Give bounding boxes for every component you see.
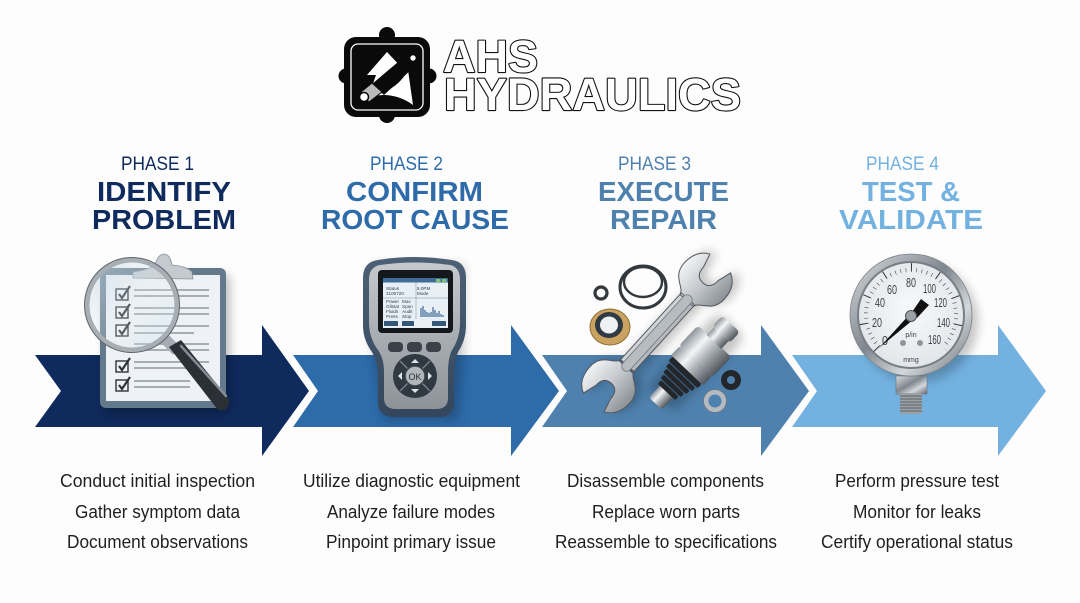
gauge numbers: 160 [928, 332, 941, 347]
gauge ticks [863, 267, 959, 349]
icon: diagnostic scanner [363, 257, 466, 420]
text block: phase 4 tasks: Perform pressure test [835, 470, 999, 491]
scanner faceplate [369, 262, 460, 409]
heading: phase 1: PHASE 1 [121, 154, 194, 175]
magnifier handle [165, 339, 229, 410]
heading: phase 1 [92, 154, 236, 235]
logo wordmark: HYDRAULICS [444, 69, 741, 120]
icon: wrench, seals and valve [574, 241, 748, 423]
logo wordmark [443, 31, 741, 120]
text block: phase 2 tasks: Pinpoint primary issue [326, 531, 496, 552]
heading: phase 4: PHASE 4 [866, 154, 939, 175]
gauge dial [859, 263, 963, 367]
text block: phase 4 tasks: Certify operational status [821, 531, 1013, 552]
clipboard board [100, 268, 226, 408]
logo emblem [338, 27, 436, 123]
icon: diagnostic scanner: Span [402, 304, 413, 309]
heading: phase 4: VALIDATE [839, 204, 983, 235]
clipboard paper [106, 275, 220, 401]
gauge numbers: 100 [923, 281, 936, 296]
gauge numbers: 20 [872, 315, 882, 330]
icon: diagnostic scanner: Oilstat [386, 304, 400, 309]
gauge numbers: 140 [937, 315, 950, 330]
icon: diagnostic scanner: Status [386, 286, 400, 291]
text block: phase 1 tasks [60, 470, 255, 552]
text block: phase 3 tasks: Disassemble components [567, 470, 764, 491]
gauge bezel [850, 254, 972, 376]
text block: phase 3 tasks [555, 470, 777, 552]
icon: clipboard and magnifying glass [84, 254, 230, 414]
icon: diagnostic scanner: OK [408, 372, 422, 382]
logo: AHS Hydraulics [338, 27, 741, 123]
heading: phase 2: PHASE 2 [370, 154, 443, 175]
text block: phase 2 tasks: Analyze failure modes [327, 501, 495, 522]
text block: phase 4 tasks [821, 470, 1013, 552]
heading: phase 3: PHASE 3 [618, 154, 691, 175]
text block: phase 4 tasks: Monitor for leaks [853, 501, 981, 522]
washers [704, 373, 738, 412]
gauge numbers: 40 [875, 295, 885, 310]
heading: phase 3: EXECUTE [598, 176, 729, 207]
magnifier lens [87, 260, 177, 350]
icon: diagnostic scanner: Press [386, 314, 398, 319]
gauge numbers: 60 [887, 282, 897, 297]
icon: diagnostic scanner: Audit [402, 309, 413, 314]
heading: phase 2: ROOT CAUSE [321, 204, 509, 235]
heading: phase 1: PROBLEM [92, 204, 236, 235]
heading: phase 3 [598, 154, 729, 235]
clipboard clip [133, 254, 193, 279]
gauge numbers: 0 [882, 333, 888, 348]
text block: phase 2 tasks: Utilize diagnostic equipment [303, 470, 520, 491]
icon: diagnostic scanner: 3100720 [386, 291, 404, 296]
checklist [116, 286, 209, 391]
scanner d-pad [393, 354, 437, 398]
icon: diagnostic scanner: Max [402, 299, 411, 304]
heading: phase 4: TEST & [862, 176, 960, 207]
heading: phase 4 [839, 154, 983, 235]
text block: phase 1 tasks: Document observations [67, 531, 248, 552]
icon: diagnostic scanner: 5.0PM [417, 286, 430, 291]
gauge numbers: 80 [906, 275, 916, 290]
icon: diagnostic scanner: Stop [402, 314, 412, 319]
logo wordmark: AHS [443, 31, 538, 82]
valve threads [652, 356, 702, 406]
scanner soft keys [388, 342, 403, 352]
scanner screen [378, 270, 453, 333]
gauge numbers [872, 275, 950, 364]
heading: phase 2: CONFIRM [346, 176, 483, 207]
seal ring [590, 309, 630, 345]
icon: pressure gauge [850, 254, 978, 414]
gauge numbers: p/in [905, 332, 917, 339]
hydraulic valve [639, 308, 748, 419]
arrow: phase 3 [542, 325, 809, 456]
scanner body [363, 257, 466, 417]
o-rings [595, 266, 666, 308]
text block: phase 1 tasks: Conduct initial inspection [60, 470, 255, 491]
gauge numbers: 120 [934, 295, 947, 310]
gauge screws [900, 340, 906, 346]
heading: phase 1: IDENTIFY [97, 176, 231, 207]
gauge fitting [896, 376, 927, 414]
gauge numbers: mmg [903, 357, 919, 364]
icon: diagnostic scanner: Power [386, 299, 399, 304]
scanner bar graph [421, 306, 443, 317]
text block: phase 3 tasks: Replace worn parts [592, 501, 740, 522]
wrench [574, 241, 747, 423]
heading: phase 3: REPAIR [610, 204, 717, 235]
text block: phase 3 tasks: Reassemble to specifications [555, 531, 777, 552]
text block: phase 2 tasks [303, 470, 520, 552]
arrow: phase 4 [792, 325, 1046, 456]
text block: phase 1 tasks: Gather symptom data [75, 501, 241, 522]
icon: diagnostic scanner: Mode [417, 291, 429, 296]
heading: phase 2 [321, 154, 509, 235]
gauge needle [879, 299, 929, 348]
arrow: phase 2 [293, 325, 559, 456]
arrow: phase 1 [35, 325, 309, 456]
icon: diagnostic scanner: Fluids [386, 309, 399, 314]
